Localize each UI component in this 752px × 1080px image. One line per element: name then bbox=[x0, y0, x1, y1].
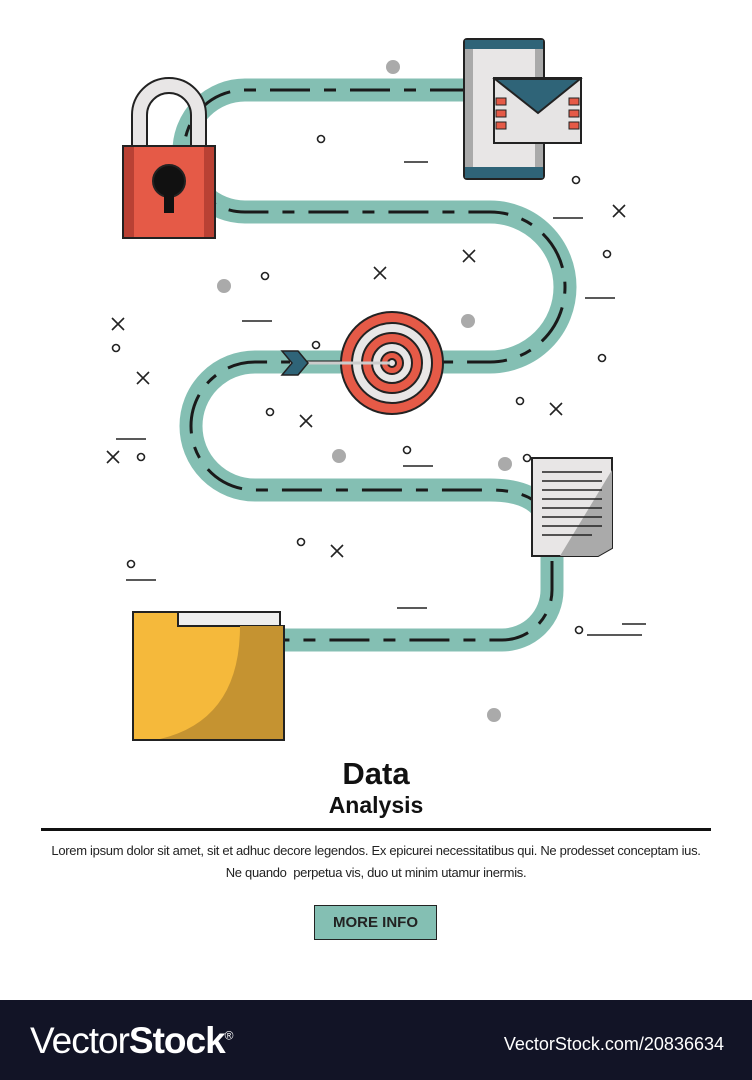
title: Analysis bbox=[329, 792, 423, 818]
icon: document bbox=[532, 458, 612, 556]
road bbox=[184, 90, 565, 640]
icon: target with arrow bbox=[282, 312, 443, 414]
illustration bbox=[106, 38, 646, 741]
body text bbox=[51, 843, 701, 880]
button: more info bbox=[314, 905, 437, 940]
footer bbox=[0, 1000, 752, 1080]
title: Data bbox=[342, 756, 410, 791]
footer: VectorStock.com/20836634 bbox=[504, 1034, 724, 1054]
decorations bbox=[217, 60, 512, 722]
body text: Lorem ipsum dolor sit amet, sit et adhuc decore legendos. Ex epicurei necessitatibus qui. Ne prodesset conceptam ius. bbox=[51, 843, 701, 858]
title bbox=[329, 756, 423, 818]
icon: folder bbox=[133, 612, 284, 740]
body text: Ne quando perpetua vis, duo ut minim utamur inermis. bbox=[226, 865, 526, 880]
icon: padlock bbox=[123, 78, 215, 238]
divider line bbox=[41, 828, 711, 831]
icon: phone with envelope bbox=[464, 39, 581, 179]
footer: VectorStock® bbox=[30, 1020, 233, 1061]
button: more info: MORE INFO bbox=[333, 914, 418, 931]
